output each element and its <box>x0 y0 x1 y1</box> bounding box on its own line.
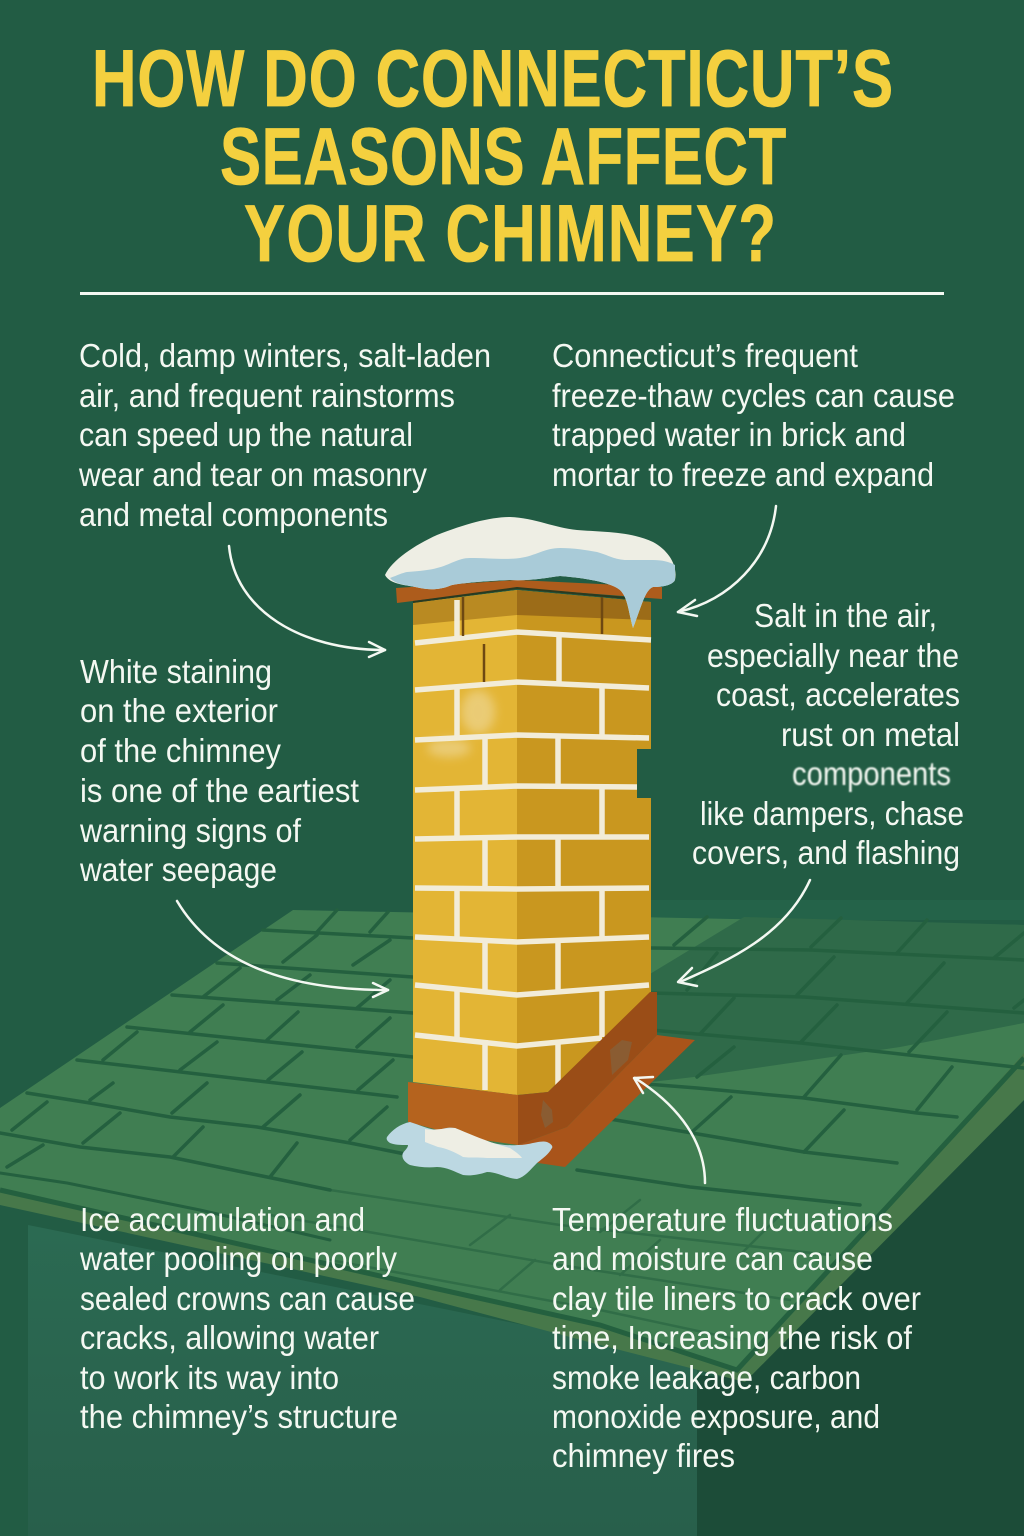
text: salt in the air: like dampers, chase <box>700 795 964 832</box>
missing brick notch <box>637 749 652 798</box>
roof fascia <box>0 1045 1024 1382</box>
text: salt in the air: rust on metal <box>781 716 960 753</box>
text: freeze-thaw cycles: trapped water in brick and <box>552 416 906 453</box>
text: ice accumulation: the chimney’s structure <box>80 1398 398 1435</box>
text: ice accumulation: water pooling on poorly <box>79 1240 397 1277</box>
text: temperature fluctuations: Temperature fluctuations <box>552 1201 893 1238</box>
text: salt in the air: Salt in the air, <box>754 597 937 634</box>
text: temperature fluctuations: clay tile liners to crack over <box>552 1280 921 1317</box>
text: salt in the air: components <box>792 755 951 792</box>
strip above roof <box>651 900 1024 920</box>
arrow: staining to chimney <box>177 901 388 997</box>
text: salt in the air: coast, accelerates <box>716 676 960 713</box>
house wall <box>28 1225 697 1536</box>
title <box>92 34 893 279</box>
text: freeze-thaw cycles: mortar to freeze and expand <box>552 456 934 493</box>
title: HOW DO CONNECTICUT’S <box>92 34 893 124</box>
text: temperature fluctuations: chimney fires <box>552 1437 735 1474</box>
text: ice accumulation: Ice accumulation and <box>80 1201 365 1238</box>
chimney left face <box>413 590 517 1095</box>
text: cold damp winters: wear and tear on masonry <box>78 456 427 493</box>
text: white staining: is one of the eartiest <box>80 772 359 809</box>
arrow: freeze-thaw to crown <box>678 506 776 616</box>
snow on crown <box>385 517 676 628</box>
shadow under crown <box>413 590 651 625</box>
text: cold damp winters: can speed up the natural <box>79 416 413 453</box>
roof surface <box>0 910 1024 1373</box>
text: temperature fluctuations: time, Increasing the risk of <box>552 1319 913 1356</box>
text: cold damp winters: and metal components <box>79 496 388 533</box>
text: temperature fluctuations: monoxide exposure, and <box>552 1398 880 1435</box>
base flashing <box>408 992 695 1167</box>
text: ice accumulation: to work its way into <box>80 1359 339 1396</box>
chimney shadow on roof <box>625 917 1024 1085</box>
text: salt in the air: covers, and flashing <box>692 834 960 871</box>
white staining <box>427 690 495 757</box>
text: freeze-thaw cycles: Connecticut’s frequent <box>552 337 858 374</box>
chimney right face <box>517 590 651 1095</box>
text: cold damp winters <box>78 337 491 533</box>
text: temperature fluctuations <box>552 1201 921 1474</box>
text: salt in the air <box>692 597 964 871</box>
text: salt in the air: especially near the <box>707 637 959 674</box>
title divider <box>80 292 944 295</box>
title: YOUR CHIMNEY? <box>244 189 776 279</box>
title: SEASONS AFFECT <box>220 112 786 202</box>
text: temperature fluctuations: and moisture can cause <box>552 1240 873 1277</box>
mortar courses <box>415 632 651 1046</box>
crown cap <box>396 580 662 603</box>
mortar joints <box>457 600 602 1090</box>
text: cold damp winters: Cold, damp winters, salt-laden <box>79 337 491 374</box>
text: ice accumulation: cracks, allowing water <box>80 1319 379 1356</box>
text: white staining: warning signs of <box>79 812 302 849</box>
thin brick cracks <box>463 597 602 682</box>
chimney <box>385 517 695 1179</box>
arrow: winters to chimney <box>229 546 385 657</box>
text: white staining: of the chimney <box>80 732 281 769</box>
text: white staining: water seepage <box>79 851 277 888</box>
text: ice accumulation <box>79 1201 415 1435</box>
arrow: salt to flashing <box>678 880 810 986</box>
text: temperature fluctuations: smoke leakage, carbon <box>552 1359 861 1396</box>
text: ice accumulation: sealed crowns can cause <box>80 1280 415 1317</box>
text: white staining: White staining <box>80 653 272 690</box>
text: freeze-thaw cycles <box>552 337 955 493</box>
text: white staining <box>79 653 359 888</box>
text: freeze-thaw cycles: freeze-thaw cycles can cause <box>552 377 955 414</box>
roof lower dark edge <box>0 1058 1024 1370</box>
roof shingle lines <box>0 910 1024 1340</box>
arrow: temperature to flashing <box>634 1077 705 1183</box>
house wall and roof <box>0 900 1024 1536</box>
text: cold damp winters: air, and frequent rainstorms <box>79 377 455 414</box>
snow at base <box>387 1122 552 1179</box>
shaded house side <box>697 1100 1024 1536</box>
text: white staining: on the exterior <box>80 692 278 729</box>
